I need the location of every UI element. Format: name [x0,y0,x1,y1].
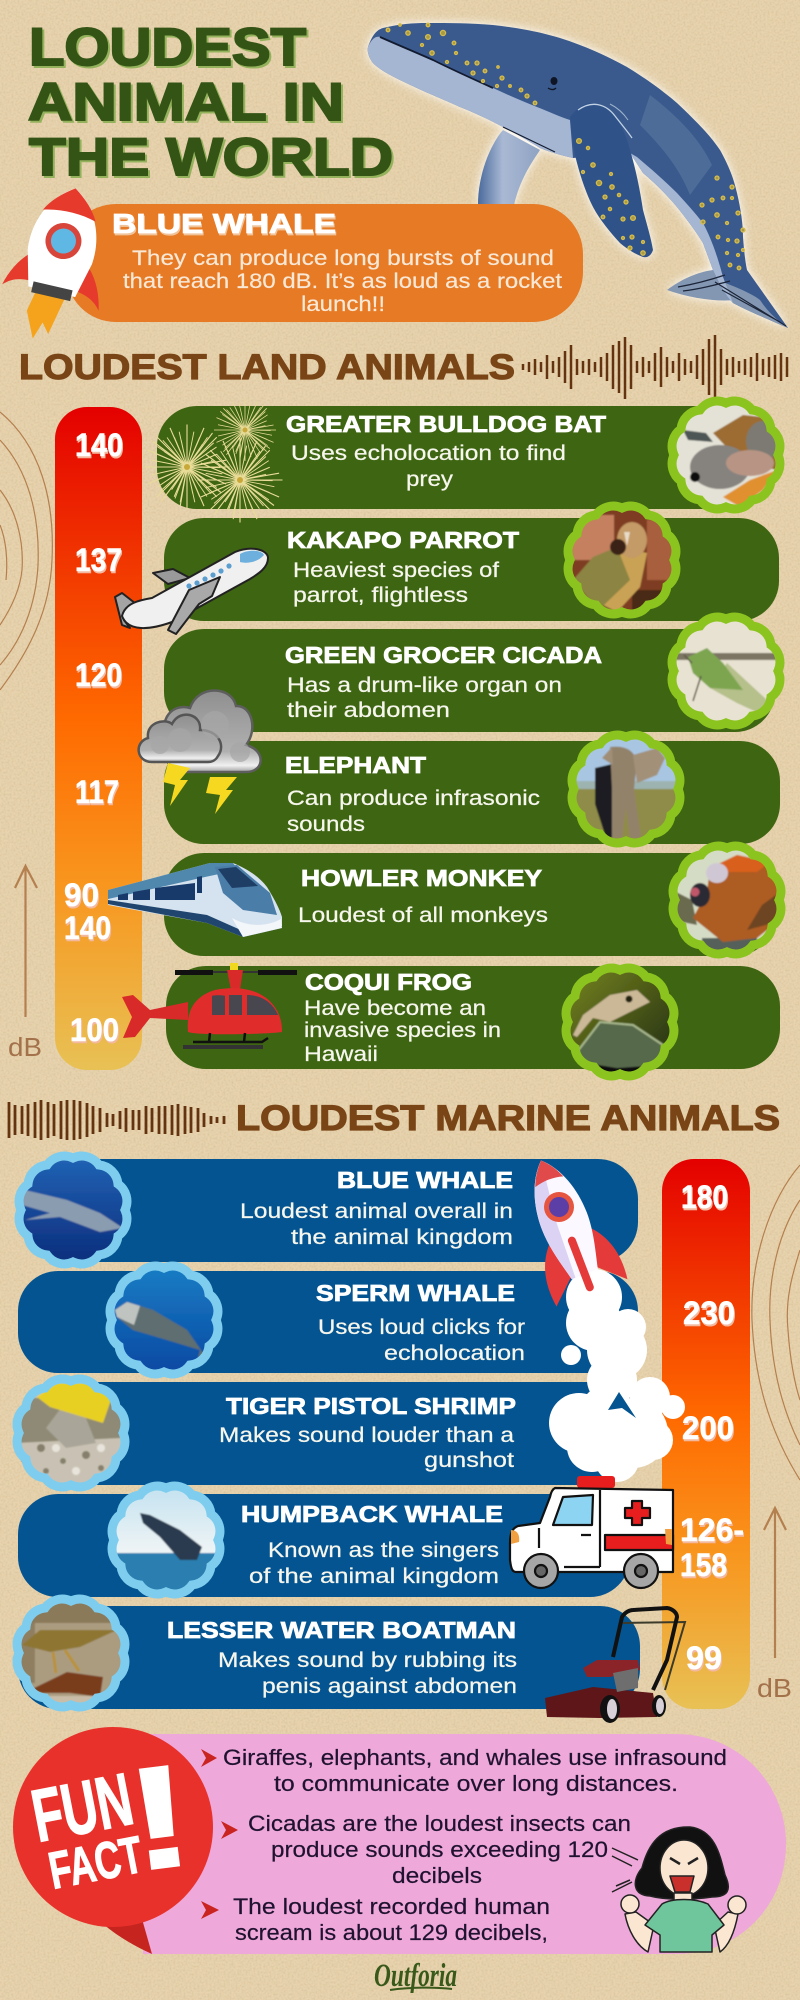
card text: Hawaii [304,1043,378,1066]
card text [240,1200,513,1249]
panel: blue whale callout [66,204,583,322]
heading: loudest land animals: LOUDEST LAND ANIMALS [19,348,515,387]
marine decibel values: 158 [680,1547,727,1583]
card heading: LESSER WATER BOATMAN [167,1617,516,1643]
land scale bar [55,407,142,1070]
icon: smoke cloud [549,1269,685,1482]
fun text: FUN [25,1757,139,1858]
card heading: HUMPBACK WHALE [241,1501,503,1527]
card heading: GREATER BULLDOG BAT [286,411,606,437]
callout body: launch!! [301,293,385,316]
card text: echolocation [384,1342,525,1365]
card text: Uses loud clicks for [318,1316,525,1339]
card text [218,1649,517,1698]
land axis: dB arrow [8,866,42,1062]
callout heading: BLUE WHALE [112,208,336,239]
card heading: COQUI FROG [305,969,472,995]
callout body: They can produce long bursts of sound [132,247,554,270]
card text [287,674,562,722]
photo badge: humpback [106,1480,226,1600]
fun fact badge [13,1727,213,1954]
card text: Has a drum-like organ on [287,674,562,697]
land decibel values: 140 [64,910,111,946]
card text: Loudest animal overall in [240,1200,513,1223]
card text: sounds [287,813,365,836]
card text: Heaviest species of [293,559,499,582]
fact 2: produce sounds exceeding 120 [271,1837,608,1862]
icon: rocket marine [505,1146,628,1307]
photo badge: sperm whale [104,1260,224,1380]
card heading: SPERM WHALE [316,1280,515,1306]
bullet arrow 2 [221,1821,238,1839]
icon: sound wave land [523,335,787,402]
callout body [123,247,562,316]
fact 3: scream is about 129 decibels, [235,1920,548,1945]
panel: fun fact [13,1727,786,1954]
photo badge: shrimp [11,1373,131,1493]
card text [287,787,540,836]
title: LOUDEST [29,18,306,77]
bullet arrow 1 [201,1749,217,1767]
panel: elephant [164,729,780,849]
panel: blue whale card [13,1150,638,1270]
card text: Uses echolocation to find [291,442,566,465]
land axis: dB arrow: dB [8,1032,42,1062]
icon: ambulance [510,1476,673,1588]
logo: outforia: Outforia [374,1958,457,1994]
bullet arrow 3 [201,1901,219,1919]
card text: parrot, flightless [293,584,468,607]
panel: green grocer cicada [164,611,786,732]
illustration: screaming woman [612,1827,746,1952]
card text [318,1316,525,1365]
photo badge: monkey [667,840,787,960]
photo badge: blue whale [13,1150,133,1270]
marine decibel values: 126- [680,1512,744,1548]
title: THE WORLD [29,128,393,187]
marine decibel values: 180 [681,1179,728,1215]
card text [249,1539,499,1588]
callout body: that reach 180 dB. It’s as loud as a rocket [123,270,562,293]
marine scale bar [662,1159,750,1709]
icon: fireworks [144,398,282,522]
land decibel values: 140 [75,427,123,463]
card text: of the animal kingdom [249,1565,499,1588]
card text: invasive species in [304,1019,501,1042]
photo badge: frog [560,962,680,1082]
photo badge: elephant [566,729,686,849]
icon: sound wave marine [9,1100,224,1140]
marine decibel values: 200 [682,1410,734,1446]
card heading: GREEN GROCER CICADA [285,642,602,668]
fact 2 [248,1811,631,1888]
card heading: TIGER PISTOL SHRIMP [226,1393,516,1419]
card text: their abdomen [287,699,450,722]
marine axis: dB arrow [757,1508,792,1703]
card heading: KAKAPO PARROT [287,527,519,553]
fact 1: to communicate over long distances. [274,1771,678,1796]
panel: sperm whale card [18,1260,638,1380]
card text: prey [406,468,454,491]
card text: Have become an [304,997,486,1020]
title [28,18,393,187]
exclamation mark: ! [116,1732,204,1904]
card text: gunshot [424,1449,514,1472]
fact 2: decibels [392,1863,482,1888]
card text: Known as the singers [268,1539,499,1562]
fact 1: Giraffes, elephants, and whales use infrasound [223,1745,727,1770]
card text: Loudest of all monkeys [298,904,548,927]
card text: Makes sound louder than a [219,1424,514,1447]
panel: greater bulldog bat [157,395,786,515]
land decibel values: 90 [64,877,99,913]
photo badge: kakapo [562,500,682,620]
panel: humpback whale card [18,1480,630,1600]
photo badge: bat [666,395,786,515]
photo badge: cicada [666,611,786,731]
land decibel values: 120 [75,657,122,693]
card text [293,559,499,607]
panel: howler monkey [164,840,787,960]
card text: Can produce infrasonic [287,787,540,810]
card text [304,997,501,1066]
card text [291,442,566,491]
fact 3 [233,1894,550,1945]
marine decibel values: 230 [683,1295,735,1331]
marine decibel values [680,1179,744,1676]
fact text: FACT [44,1826,148,1901]
marine axis: dB arrow: dB [757,1673,792,1703]
icon: helicopter [122,963,297,1049]
land decibel values: 100 [70,1012,119,1048]
card text [219,1424,514,1472]
land decibel values: 137 [75,542,122,578]
card text: Makes sound by rubbing its [218,1649,517,1672]
icon: lawn mower [545,1608,685,1723]
panel: kakapo parrot [164,500,779,621]
fact 2: Cicadas are the loudest insects can [248,1811,631,1836]
card text: penis against abdomen [262,1675,517,1698]
icon: airplane [115,549,268,634]
icon: storm cloud [139,690,261,814]
marine decibel values: 99 [686,1640,722,1676]
heading: loudest marine animals: LOUDEST MARINE ANIMALS [236,1099,780,1138]
icon: rocket [0,177,124,352]
panel: tiger pistol shrimp card [11,1373,638,1493]
panel: coqui frog [166,962,780,1082]
fact 1 [223,1745,727,1796]
land decibel values: 117 [75,774,119,810]
card heading: ELEPHANT [285,752,426,778]
fact 3: The loudest recorded human [233,1894,550,1919]
card heading: HOWLER MONKEY [301,865,542,891]
photo badge: water boatman [11,1593,131,1713]
card heading: BLUE WHALE [337,1167,513,1193]
panel: lesser water boatman card [11,1593,640,1713]
land decibel values [64,427,123,1048]
title: ANIMAL IN [28,73,344,132]
card text: the animal kingdom [291,1226,513,1249]
icon: train [108,863,282,937]
illustration: blue whale [368,23,788,328]
